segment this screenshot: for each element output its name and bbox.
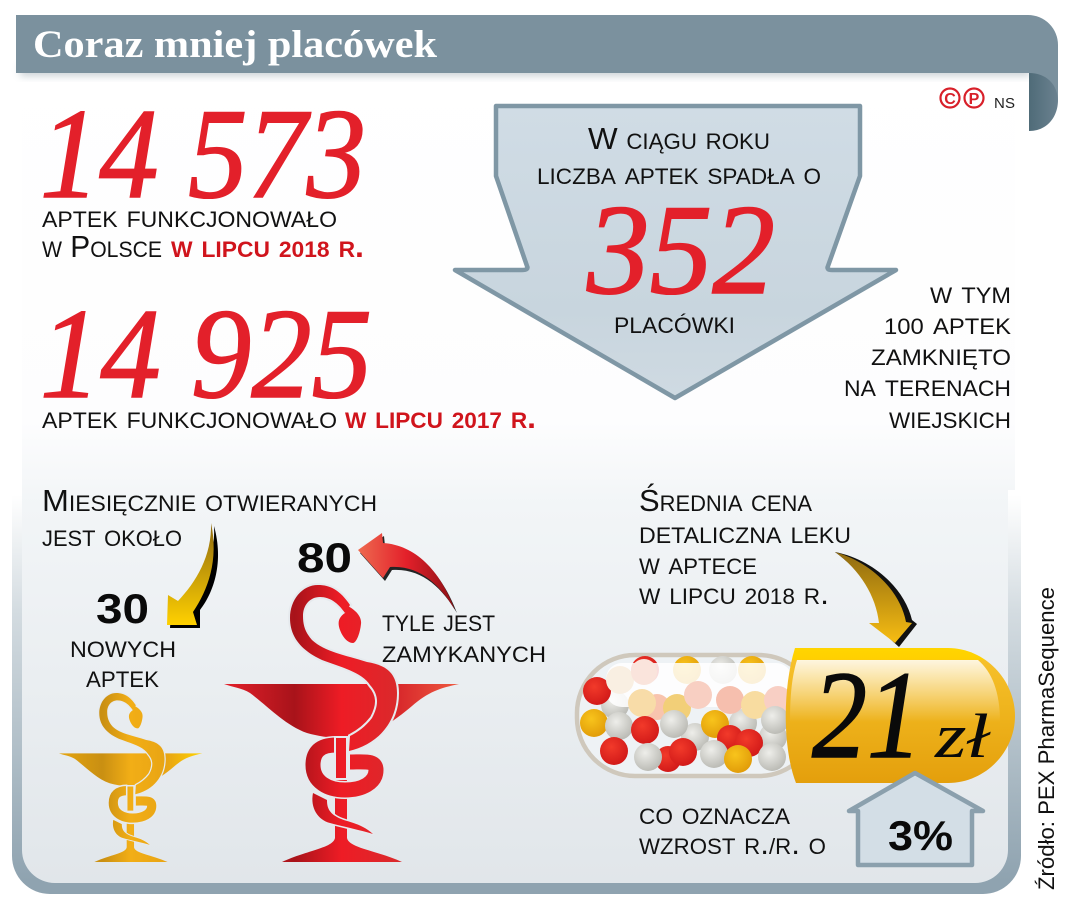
price: 21	[812, 647, 922, 785]
number 80: 80	[297, 534, 352, 581]
copyright marks: NS	[994, 95, 1015, 112]
text: average price: w lipcu 2018 r.	[639, 576, 829, 611]
stat: 14 925 in July 2017: aptek funkcjonowało	[42, 400, 337, 435]
callout: down arrow 352	[455, 106, 896, 398]
copyright marks: C	[944, 91, 956, 108]
text: new pharmacies: nowych	[70, 629, 176, 664]
source note: Źródło: PEX PharmaSequence	[1034, 587, 1059, 890]
text: which means growth: co oznacza	[639, 796, 790, 831]
text: rural closures	[844, 275, 1011, 435]
text: average price: Średnia cena	[639, 482, 812, 518]
text: which means growth	[639, 796, 826, 861]
copyright marks: P	[969, 91, 980, 108]
stat: 14 925 in July 2017: 14 925	[40, 282, 372, 425]
arrow: gold to 30	[167, 523, 218, 628]
price: zł	[934, 703, 991, 771]
text: monthly openings: Miesięcznie otwieranych	[42, 483, 377, 518]
text: closures per month: zamykanych	[382, 634, 546, 669]
text: monthly openings	[42, 483, 377, 553]
text: which means growth: wzrost r./r. o	[639, 826, 826, 861]
arrow: gold to capsule	[835, 552, 917, 647]
title: Coraz mniej placówek	[33, 23, 437, 66]
text: closures per month: tyle jest	[382, 603, 495, 638]
text: rural closures: zamknięto	[871, 337, 1011, 372]
text: average price: w aptece	[639, 546, 757, 581]
icon: red bowl of Hygieia	[224, 585, 459, 862]
text: rural closures: wiejskich	[889, 400, 1011, 435]
text: new pharmacies: aptek	[86, 659, 159, 694]
text: average price	[639, 482, 851, 611]
text: new pharmacies	[70, 629, 176, 694]
callout: down arrow 352: liczba aptek spadła o	[537, 156, 821, 191]
text: rural closures: w tym	[930, 275, 1011, 310]
text: monthly openings: jest około	[42, 518, 182, 553]
callout: down arrow 352: placówki	[614, 305, 735, 340]
capsule gold cap	[786, 648, 1015, 783]
stat: 14 573 in July 2018: w lipcu 2018 r.	[171, 229, 364, 264]
callout: down arrow 352: W ciągu roku	[588, 121, 770, 156]
capsule pellets	[580, 656, 792, 773]
stat: 14 925 in July 2017	[40, 282, 536, 435]
text: closures per month	[382, 603, 546, 669]
copyright marks	[940, 88, 1015, 112]
callout: up arrow 3%	[849, 773, 983, 865]
text: average price: detaliczna leku	[639, 515, 851, 550]
stat: 14 925 in July 2017: w lipcu 2017 r.	[345, 400, 536, 435]
arrow: red to 80	[358, 533, 457, 613]
price	[812, 647, 991, 785]
stat: 14 573 in July 2018: w Polsce	[42, 229, 162, 264]
icon: capsule with balls	[577, 647, 1015, 785]
stat: 14 573 in July 2018: aptek funkcjonowało	[42, 199, 337, 234]
stat: 14 573 in July 2018: 14 573	[40, 82, 366, 225]
text: rural closures: 100 aptek	[884, 306, 1011, 341]
callout: down arrow 352: 352	[586, 178, 775, 321]
title banner	[16, 15, 1058, 131]
capsule clear shell	[577, 655, 817, 776]
callout: up arrow 3%: 3%	[888, 812, 953, 859]
text: rural closures: na terenach	[844, 368, 1011, 403]
icon: gold bowl of Hygieia	[59, 693, 202, 862]
number 30: 30	[96, 585, 149, 632]
